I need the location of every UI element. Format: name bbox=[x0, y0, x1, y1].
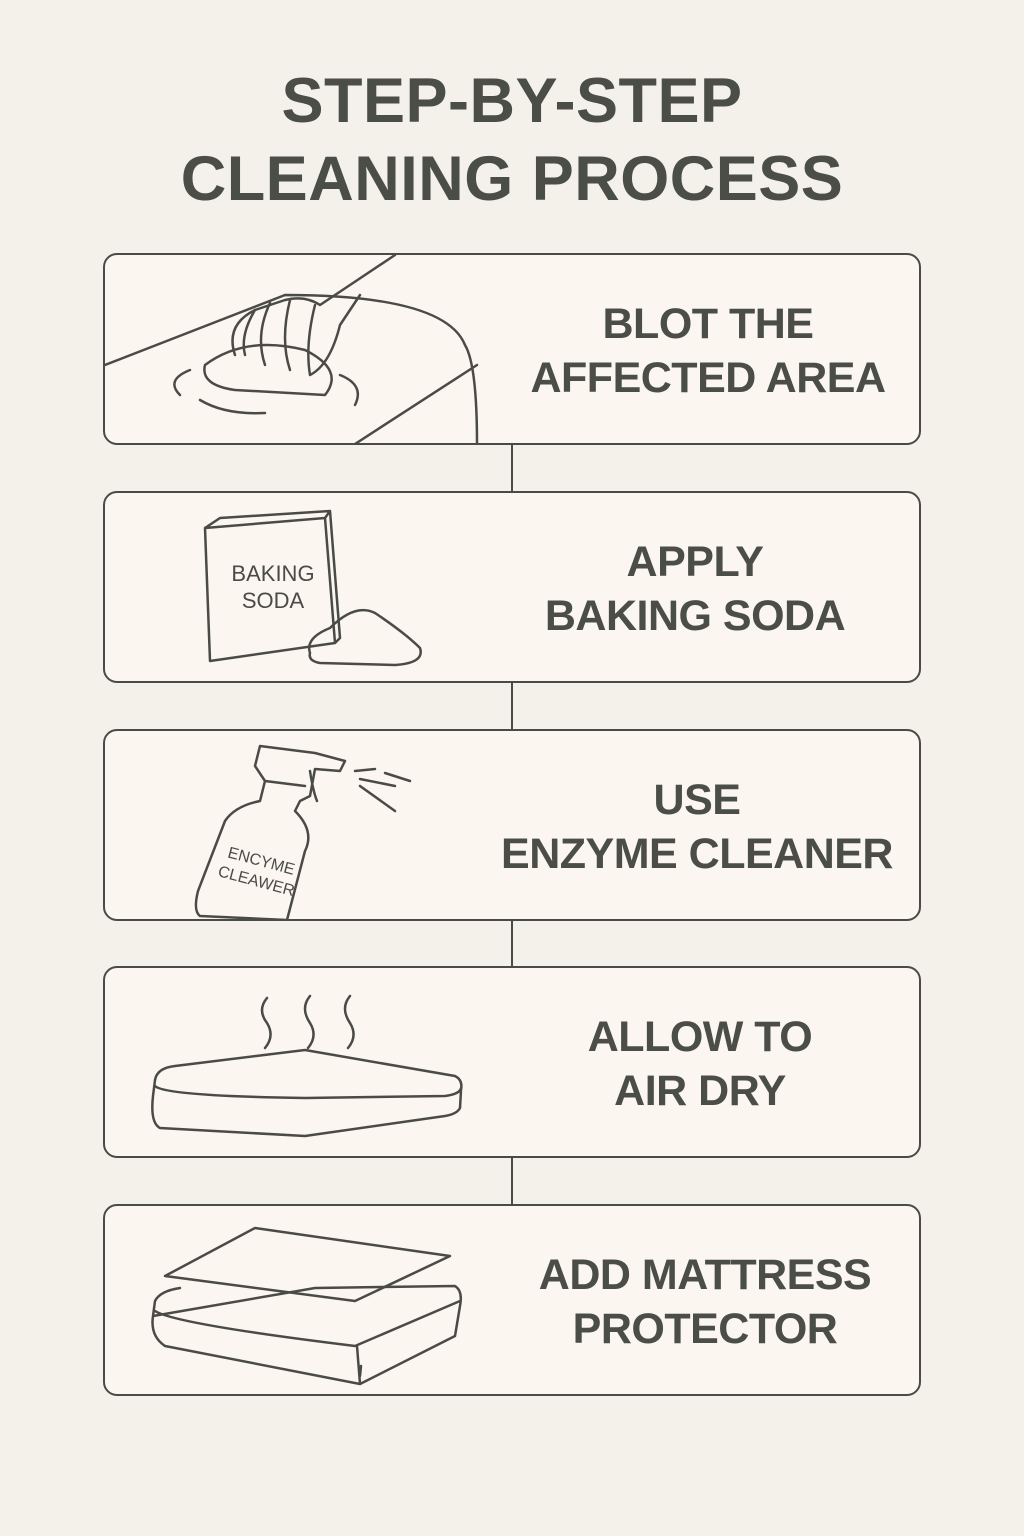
label bbox=[588, 1013, 812, 1115]
panel: enzyme bbox=[103, 729, 921, 921]
panel: blot bbox=[103, 253, 921, 445]
panel: protector bbox=[103, 1204, 921, 1396]
label: BAKING SODA bbox=[545, 592, 845, 640]
label: ALLOW TO bbox=[588, 1013, 812, 1061]
label: AIR DRY bbox=[614, 1067, 786, 1115]
panel: baking soda bbox=[103, 491, 921, 683]
label: USE bbox=[654, 776, 740, 824]
icon: baking soda box bbox=[204, 510, 422, 666]
label bbox=[530, 300, 886, 402]
label: BLOT THE bbox=[602, 300, 813, 348]
icon: baking soda box: BAKING bbox=[231, 561, 315, 586]
title: CLEANING PROCESS bbox=[181, 144, 843, 214]
icon: mattress protector bbox=[151, 1226, 462, 1386]
panel: air dry bbox=[103, 966, 921, 1158]
icon: mattress with steam bbox=[151, 994, 463, 1138]
label: APPLY bbox=[627, 538, 763, 586]
icon: spray bottle: ENCYME bbox=[226, 845, 296, 879]
label: PROTECTOR bbox=[573, 1305, 837, 1353]
label: ADD MATTRESS bbox=[539, 1251, 871, 1299]
icon: baking soda box: SODA bbox=[242, 588, 304, 613]
label: AFFECTED AREA bbox=[530, 354, 886, 402]
title bbox=[181, 66, 843, 214]
connector lines bbox=[511, 445, 513, 1204]
label bbox=[501, 776, 893, 878]
icon: spray bottle: CLEAWER bbox=[216, 863, 296, 900]
label bbox=[539, 1251, 871, 1353]
label: ENZYME CLEANER bbox=[501, 830, 893, 878]
icon: hand blotting bbox=[105, 255, 478, 443]
title: STEP-BY-STEP bbox=[281, 66, 743, 136]
icon: spray bottle bbox=[194, 744, 412, 919]
label bbox=[545, 538, 845, 640]
